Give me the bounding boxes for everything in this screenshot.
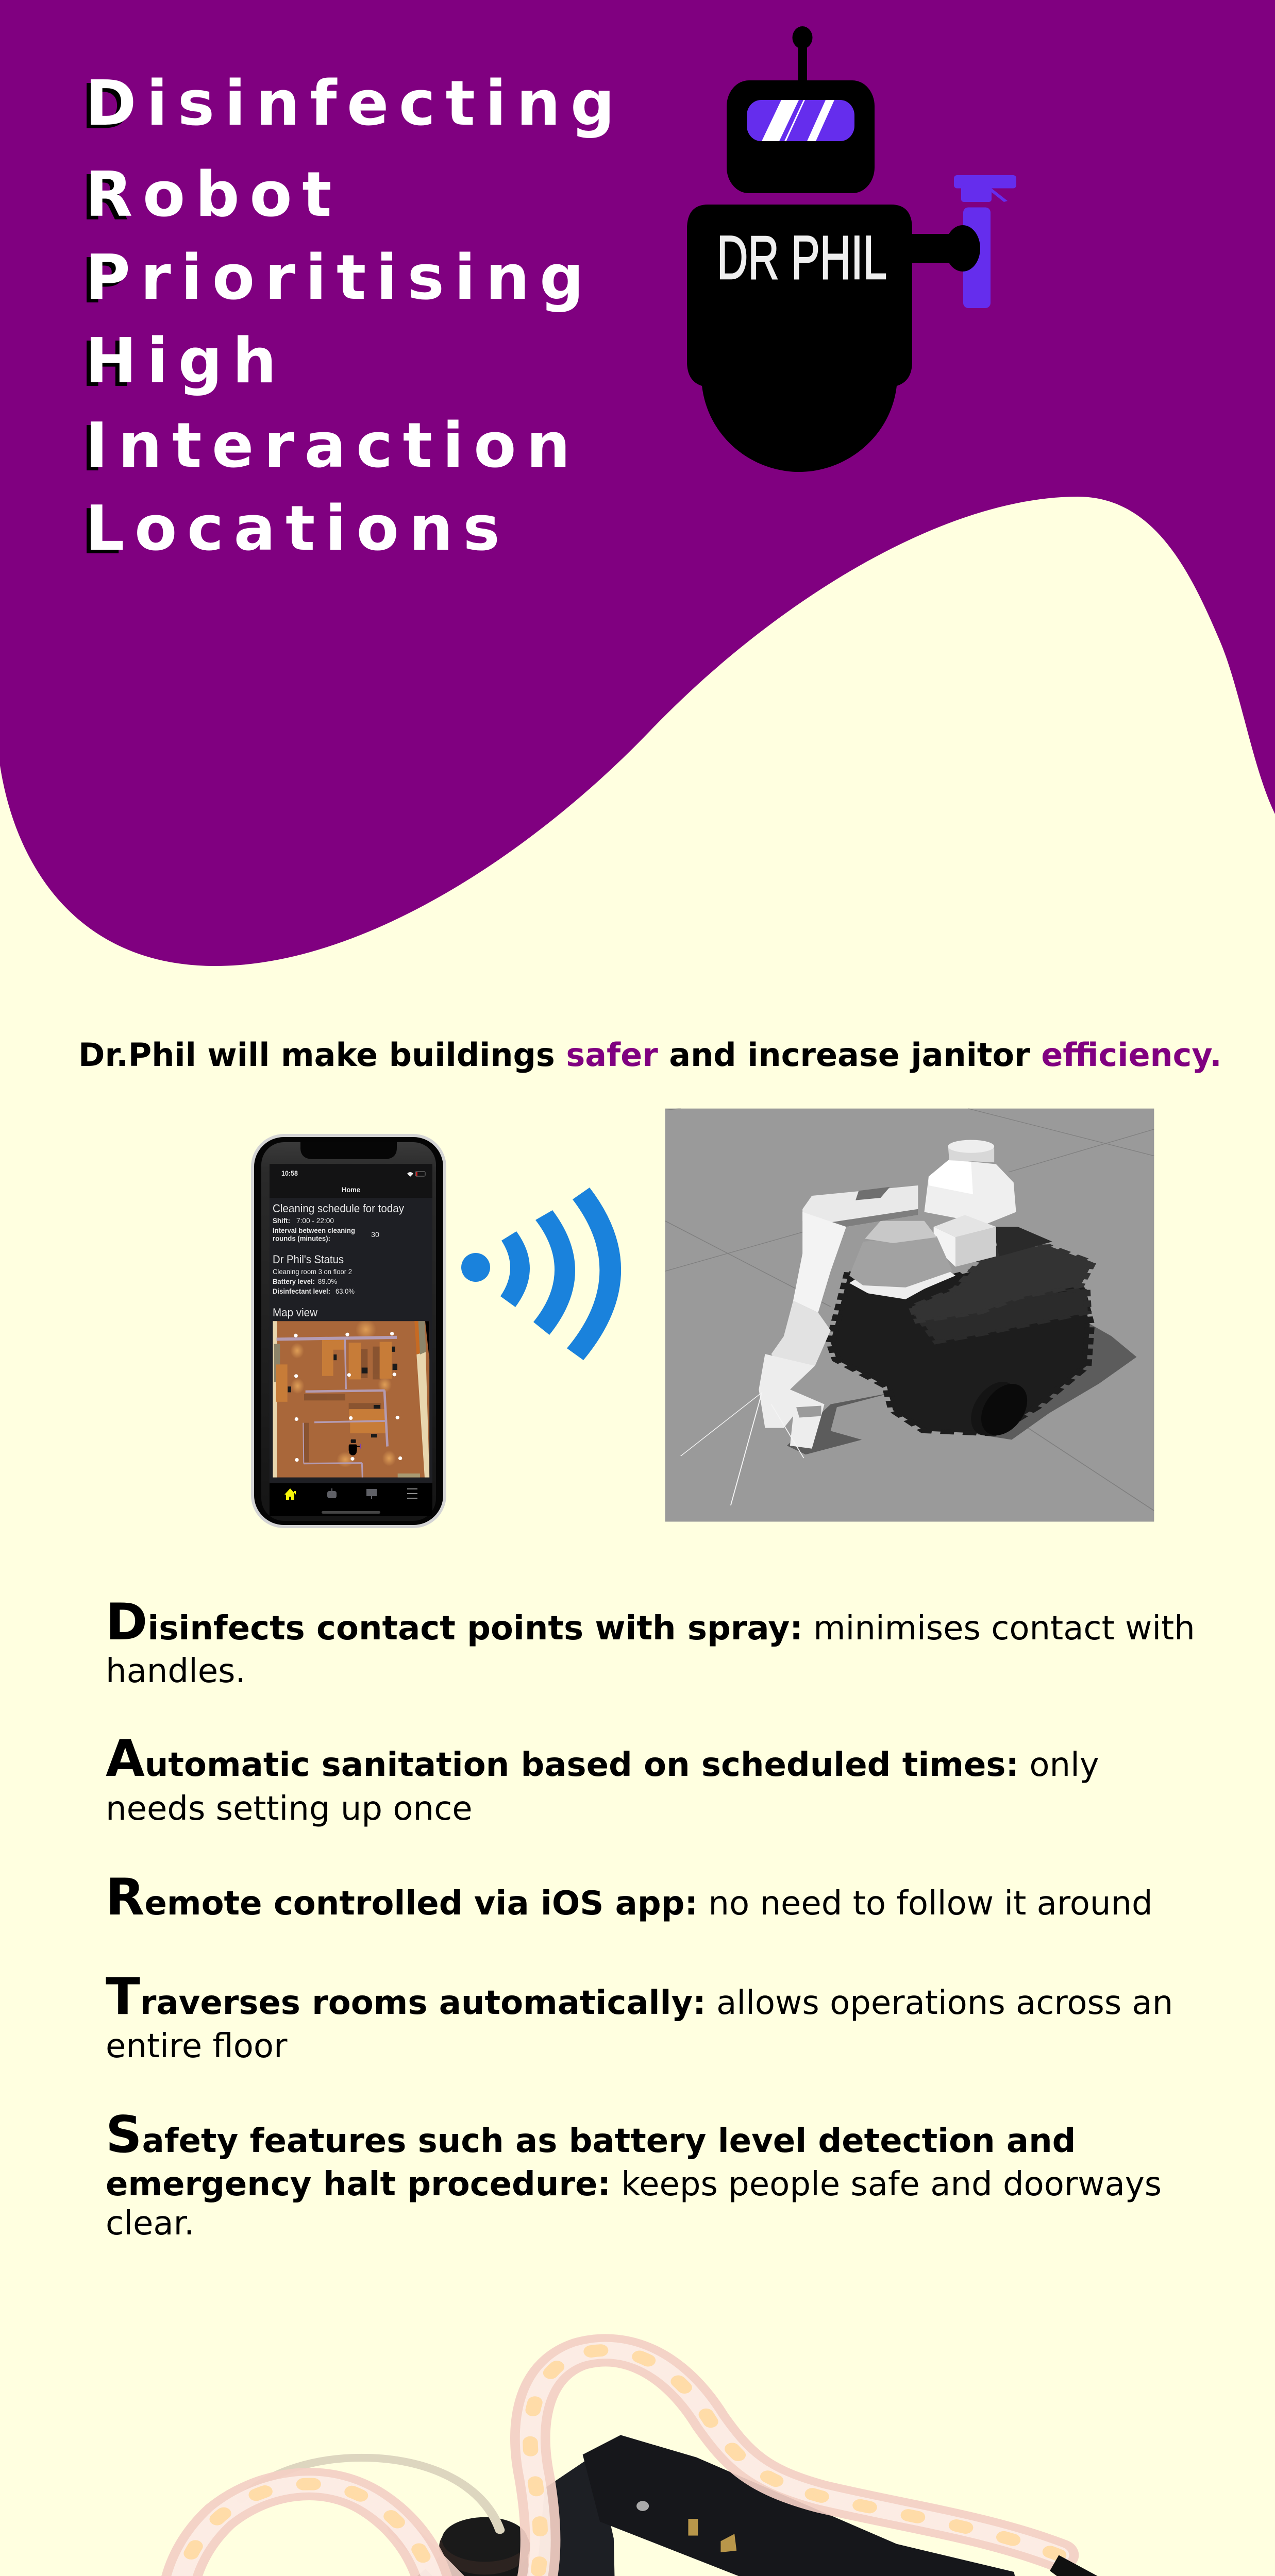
title line 3: Prioritising: [85, 242, 594, 314]
status bar time: 10:58: [281, 1169, 298, 1177]
status section: 89.0%: [318, 1277, 337, 1285]
home indicator: [322, 1511, 380, 1514]
tab icon: menu: [407, 1488, 417, 1499]
simulated arm turret: [849, 1221, 955, 1299]
mascot spray bottle: [954, 175, 1016, 308]
schedule section: [273, 1202, 404, 1243]
wifi signal icon: [461, 1188, 621, 1360]
app header bar: [270, 1164, 432, 1198]
simulation floor: [665, 1109, 1154, 1522]
mascot head: [727, 80, 875, 193]
feature: traverses: [106, 1968, 1173, 2065]
map view heading: Map view: [273, 1306, 317, 1319]
app content background: [270, 1198, 432, 1483]
mascot body: [687, 205, 912, 472]
nozzle tip: [1050, 2555, 1100, 2576]
schedule section: Interval between cleaning: [273, 1226, 355, 1234]
feature: automatic: needs setting up once: [106, 1790, 473, 1828]
feature: safety: [106, 2106, 1162, 2243]
schedule section: 7:00 - 22:00: [296, 1216, 334, 1225]
robot photo illustration: [162, 2350, 1135, 2576]
phone frame: [251, 1134, 446, 1528]
app tab bar background: [270, 1483, 432, 1516]
glowing tubing: [177, 2350, 1059, 2576]
feature: safety: emergency halt procedure: keeps people safe and doorways: [106, 2165, 1162, 2204]
simulated spray lines: [681, 1393, 804, 1505]
status bar icons: [407, 1172, 425, 1177]
arm segments: [524, 2435, 1021, 2576]
status section: Dr Phil's Status: [273, 1253, 344, 1266]
office map: [273, 1319, 429, 1478]
feature: safety: clear.: [106, 2205, 194, 2243]
title line 4: High: [85, 326, 287, 397]
title line 1: Disinfecting: [85, 68, 625, 140]
status section: [273, 1253, 355, 1295]
subheading sentence: Dr.Phil will make buildings safer and increase janitor efficiency.: [78, 1036, 1222, 1074]
robot mascot logo: [687, 26, 1016, 472]
phone notch: [300, 1142, 397, 1159]
feature list: [106, 1593, 1195, 2243]
status section: Disinfectant level:: [273, 1287, 330, 1295]
tab icon: home: [284, 1488, 296, 1500]
feature: traverses: entire floor: [106, 2027, 288, 2065]
phone mockup with app screen: [251, 1134, 446, 1528]
tab icon: robot: [327, 1488, 337, 1498]
status section: 63.0%: [335, 1287, 355, 1295]
feature: traverses: Traverses rooms automatically: allows operations across an: [106, 1968, 1173, 2026]
simulated disinfectant bottle: [924, 1140, 1016, 1224]
title line 5: Interaction: [85, 410, 580, 482]
schedule section: rounds (minutes):: [273, 1234, 330, 1243]
mascot name label: DR PHIL: [717, 223, 887, 292]
title block: [85, 68, 625, 565]
mascot antenna: [793, 26, 812, 82]
feature: remote: Remote controlled via iOS app: no need to follow it around: [106, 1868, 1153, 1927]
app title: Home: [342, 1185, 360, 1194]
schedule section: Shift:: [273, 1216, 290, 1225]
purple wave header background: [0, 0, 1275, 966]
simulated robot wheel: [971, 1382, 1027, 1435]
title line 2: Robot: [85, 159, 342, 231]
feature: disinfects: Disinfects contact points with spray: minimises contact with: [106, 1593, 1195, 1652]
feature: safety: Safety features such as battery level detection and: [106, 2106, 1076, 2164]
disinfectant tank: [386, 2517, 538, 2576]
simulated robot render panel: [665, 1109, 1154, 1522]
feature: disinfects: [106, 1593, 1195, 1690]
simulated robot base: [831, 1227, 1093, 1434]
schedule section: 30: [371, 1230, 379, 1239]
status section: Cleaning room 3 on floor 2: [273, 1267, 352, 1276]
feature: disinfects: handles.: [106, 1652, 246, 1690]
feature: automatic: [106, 1730, 1099, 1828]
title line 6: Locations: [85, 493, 510, 565]
simulated robot shadow: [787, 1318, 1136, 1454]
simulated arm: [759, 1185, 918, 1449]
schedule section: Cleaning schedule for today: [273, 1202, 404, 1215]
mascot visor: [747, 100, 854, 141]
simulated control box: [934, 1215, 996, 1267]
tab icon: chart: [366, 1489, 377, 1499]
feature: automatic: Automatic sanitation based on scheduled times: only: [106, 1730, 1099, 1788]
mascot arm: [910, 225, 980, 272]
status section: Battery level:: [273, 1277, 315, 1285]
